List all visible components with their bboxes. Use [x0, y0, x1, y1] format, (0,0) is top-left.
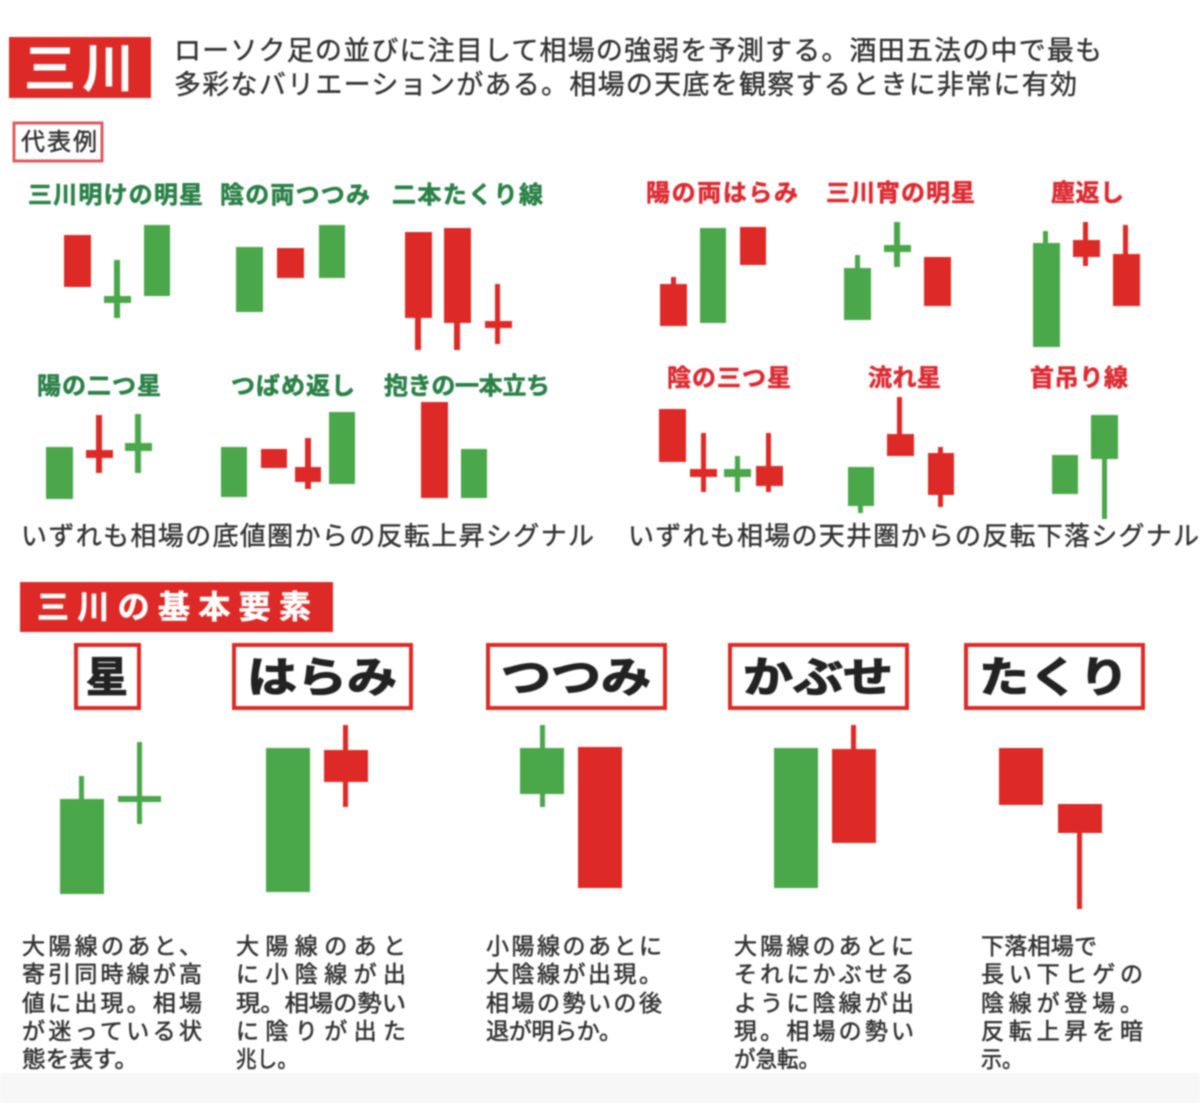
pattern: 塵返し — [1033, 180, 1140, 347]
label: たくり: たくり — [979, 654, 1129, 701]
title badge: 三川: 三川 — [24, 41, 134, 99]
intro text — [174, 36, 1102, 100]
label: かぶせ — [730, 645, 907, 708]
pattern: 陰の両つつみ — [220, 182, 370, 312]
description: はらみ: に陰りが出た — [236, 1018, 406, 1044]
description: かぶせ: 現。相場の勢い — [734, 1018, 914, 1044]
pattern: 陽の二つ星 — [37, 373, 161, 499]
element: つつみ — [486, 645, 665, 1044]
intro text: ローソク足の並びに注目して相場の強弱を予測する。酒田五法の中で最も — [174, 36, 1102, 66]
element: はらみ — [234, 645, 411, 1072]
description: たくり: 反転上昇を暗 — [981, 1018, 1143, 1044]
description: つつみ: 大陰線が出現。 — [486, 961, 662, 987]
pattern: つばめ返し: つばめ返し — [231, 373, 355, 400]
label: たくり — [966, 645, 1143, 708]
label: つつみ — [488, 645, 665, 708]
label: つつみ: つつみ — [501, 654, 651, 701]
pattern: 陰の両つつみ: 陰の両つつみ — [220, 182, 370, 209]
caption: top reversal signal: いずれも相場の天井圏からの反転下落シグナル — [628, 521, 1199, 551]
description: はらみ: に小陰線が出 — [236, 961, 406, 987]
description: かぶせ — [734, 933, 914, 1072]
description: かぶせ: が急転。 — [734, 1046, 820, 1072]
caption: bottom reversal signal: いずれも相場の底値圏からの反転上昇シグナル — [21, 521, 594, 551]
pattern: 陽の二つ星: 陽の二つ星 — [37, 373, 161, 400]
label: はらみ — [234, 645, 411, 708]
pattern: 抱きの一本立ち: 抱きの一本立ち — [384, 373, 550, 400]
description: たくり: 下落相場で — [981, 933, 1097, 959]
label: 星 — [76, 645, 139, 708]
element: 星 — [22, 645, 202, 1072]
chart: たくり — [999, 748, 1102, 909]
intro text: 多彩なバリエーションがある。相場の天底を観察するときに非常に有効 — [174, 70, 1077, 100]
pattern: 流れ星: 流れ星 — [868, 365, 941, 392]
description: たくり: 示。 — [981, 1046, 1023, 1072]
pattern: 陰の三つ星: 陰の三つ星 — [667, 365, 791, 392]
pattern: 首吊り線: 首吊り線 — [1030, 365, 1128, 392]
description: はらみ: 現。相場の勢い — [236, 990, 406, 1016]
chart: かぶせ — [774, 725, 876, 888]
pattern: 三川宵の明星: 三川宵の明星 — [826, 180, 975, 207]
section heading: 三川の基本要素 — [20, 582, 333, 632]
label: 星: 星 — [86, 654, 128, 701]
description: たくり: 長い下ヒゲの — [981, 961, 1143, 987]
label: かぶせ: かぶせ — [743, 654, 893, 701]
description: つつみ: 退が明らか。 — [486, 1018, 622, 1044]
pattern: 流れ星 — [848, 365, 954, 513]
description: 星: 寄引同時線が高 — [22, 961, 202, 987]
pattern: つばめ返し — [221, 373, 355, 497]
chart: つつみ — [520, 725, 622, 888]
description: はらみ: 兆し。 — [236, 1046, 298, 1072]
description: かぶせ: それにかぶせる — [734, 961, 914, 987]
label: 代表例 — [14, 123, 102, 161]
description: 星: 値に出現。相場 — [22, 990, 202, 1016]
pattern: 三川明けの明星 — [28, 182, 203, 318]
description: はらみ — [236, 933, 406, 1072]
description: かぶせ: 大陽線のあとに — [734, 933, 914, 959]
pattern: 陽の両はらみ — [646, 180, 798, 326]
pattern: 三川宵の明星 — [826, 180, 975, 320]
element: かぶせ — [730, 645, 914, 1072]
pattern: 塵返し: 塵返し — [1051, 180, 1124, 207]
description: つつみ: 小陽線のあとに — [486, 933, 662, 959]
pattern: 首吊り線 — [1030, 365, 1128, 519]
description: 星: が迷っている状 — [22, 1018, 202, 1044]
pattern: 三川明けの明星: 三川明けの明星 — [28, 182, 203, 209]
description: 星: 態を表す。 — [22, 1046, 138, 1072]
pattern: 二本たくり線: 二本たくり線 — [392, 182, 543, 209]
pattern: 二本たくり線 — [392, 182, 543, 350]
element: たくり — [966, 645, 1143, 1072]
pattern: 抱きの一本立ち — [384, 373, 550, 498]
label: 代表例: 代表例 — [21, 129, 97, 156]
description: はらみ: 大陽線のあと — [236, 933, 406, 959]
description: つつみ — [486, 933, 662, 1044]
pattern: 陰の三つ星 — [659, 365, 791, 492]
description: 星: 大陽線のあと、 — [22, 933, 202, 959]
description: たくり — [981, 933, 1143, 1072]
pattern: 陽の両はらみ: 陽の両はらみ — [646, 180, 798, 207]
description: たくり: 陰線が登場。 — [981, 990, 1143, 1016]
chart: 星 — [60, 742, 161, 894]
section heading: 三川の基本要素: 三川の基本要素 — [37, 589, 311, 625]
chart: はらみ — [266, 725, 368, 892]
description: かぶせ: ように陰線が出 — [734, 990, 914, 1016]
label: はらみ: はらみ — [247, 654, 397, 701]
description: つつみ: 相場の勢いの後 — [486, 990, 662, 1016]
description: 星 — [22, 933, 202, 1072]
